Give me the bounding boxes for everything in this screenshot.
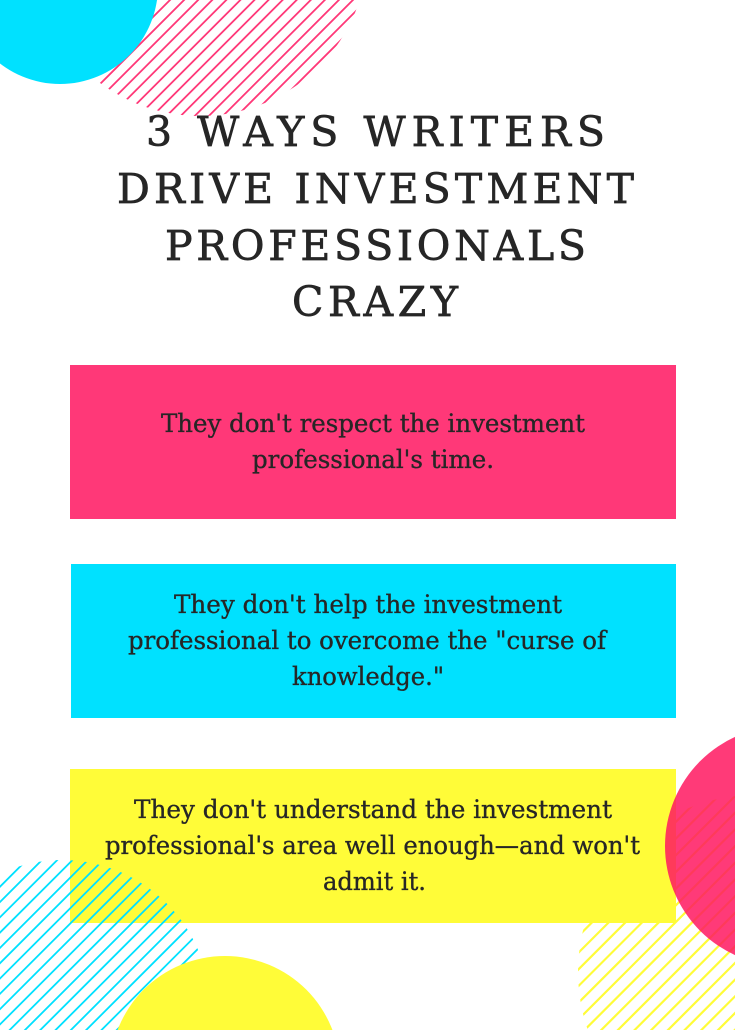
cyan card text: knowledge." bbox=[292, 662, 444, 692]
yellow card text: They don't understand the investment bbox=[134, 795, 613, 825]
pink card text bbox=[161, 409, 586, 475]
cyan card text: professional to overcome the "curse of bbox=[128, 626, 607, 656]
pink card text: They don't respect the investment bbox=[161, 409, 586, 439]
title: PROFESSIONALS bbox=[165, 222, 586, 270]
title: CRAZY bbox=[292, 278, 459, 326]
panel: yellow card bbox=[70, 769, 676, 923]
panel: pink card bbox=[70, 365, 676, 519]
cyan card text: They don't help the investment bbox=[174, 590, 563, 620]
yellow card text: professional's area well enough—and won't bbox=[105, 831, 641, 861]
cyan circle top left bbox=[0, 0, 158, 84]
title: 3 WAYS WRITERS bbox=[146, 108, 605, 156]
pink circle right bbox=[665, 726, 735, 966]
cyan card text bbox=[128, 590, 607, 692]
yellow card text bbox=[105, 795, 641, 897]
panel: cyan card bbox=[71, 564, 676, 718]
yellow card text: admit it. bbox=[323, 867, 426, 897]
title bbox=[117, 108, 634, 326]
title: DRIVE INVESTMENT bbox=[117, 165, 634, 213]
pink card text: professional's time. bbox=[252, 445, 494, 475]
pink striped circle bbox=[168, 0, 386, 134]
yellow striped circle bbox=[564, 782, 735, 1008]
yellow circle bottom bbox=[110, 956, 340, 1030]
cyan striped circle bbox=[0, 900, 152, 1030]
